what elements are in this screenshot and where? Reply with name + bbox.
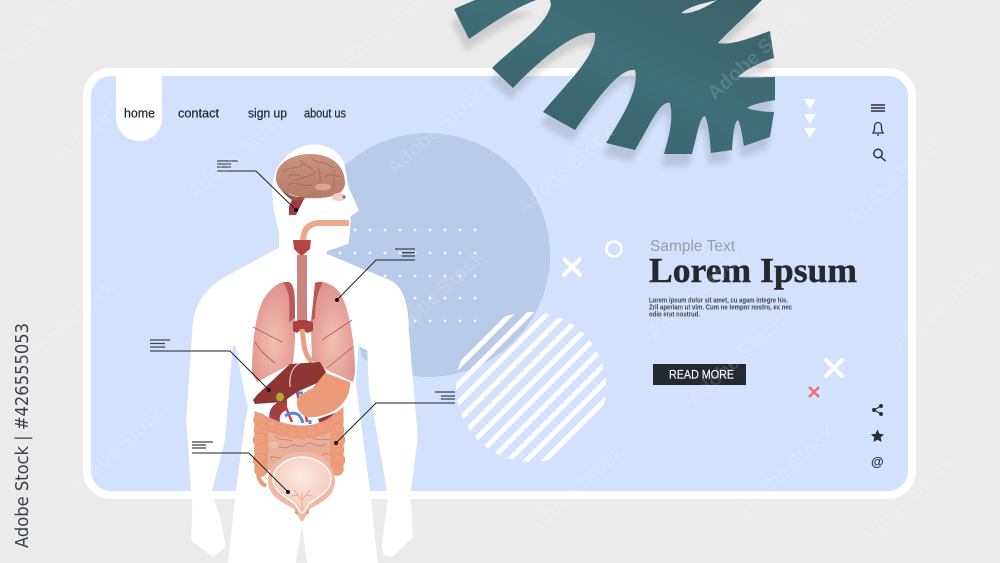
nav links: contact xyxy=(178,106,220,120)
large blue circle xyxy=(306,133,550,377)
nav links: home xyxy=(124,106,155,120)
icon: share xyxy=(872,404,882,416)
organ: left lung xyxy=(252,282,295,382)
leaf shadow xyxy=(451,12,772,166)
body text: Zril aperiam ut vim. Cum ne tempor nostro, ex nec xyxy=(649,304,792,312)
stock overlay marks: Adobe Stock xyxy=(13,276,119,375)
icon: bell xyxy=(873,122,883,135)
organ: stomach xyxy=(297,372,350,417)
side credit: Adobe Stock | #426555053 xyxy=(12,323,33,548)
icon: menu xyxy=(871,105,885,111)
icon: at sign: @ xyxy=(871,454,884,469)
body text xyxy=(649,298,792,318)
organ: brain xyxy=(276,154,346,215)
stock overlay marks: Adobe Stock xyxy=(733,421,839,520)
dot grid xyxy=(339,229,476,322)
body silhouette xyxy=(187,145,417,563)
read more button: READ MORE xyxy=(669,368,734,382)
icon: search xyxy=(874,149,886,161)
organ: larynx xyxy=(293,240,311,255)
headline: Lorem Ipsum xyxy=(649,251,857,290)
organ: pharynx tube xyxy=(303,223,349,242)
stock overlay marks: Adobe Stock xyxy=(643,246,749,345)
eyebrow text: Sample Text xyxy=(650,238,736,255)
stock overlay marks: Adobe Stock xyxy=(523,441,629,540)
callout: bladder xyxy=(192,442,290,494)
nav links xyxy=(124,106,346,120)
organ: trachea xyxy=(297,255,307,323)
organ: large intestine xyxy=(253,414,345,486)
callout: intestine xyxy=(334,392,455,445)
stock overlay marks: Adobe Stock xyxy=(843,131,949,230)
stock overlay marks: Adobe Stock xyxy=(888,256,994,355)
decoration: white cross xyxy=(563,258,581,276)
stock overlay marks: Adobe Stock xyxy=(513,121,619,220)
organ: liver xyxy=(253,362,326,404)
arm gaps xyxy=(212,343,388,563)
callout: lungs xyxy=(335,249,415,302)
organ: bladder xyxy=(268,452,335,521)
callout: brain xyxy=(217,161,298,212)
icon: star xyxy=(871,430,884,442)
callout: liver xyxy=(150,340,271,392)
monstera leaf xyxy=(454,0,775,154)
decoration: triangles xyxy=(804,99,816,138)
stock overlay marks: Adobe Stock xyxy=(383,81,489,180)
read more button xyxy=(653,364,746,385)
nav links: sign up xyxy=(248,106,287,120)
stock overlay marks: Adobe Stock xyxy=(183,106,289,205)
lung details xyxy=(253,282,353,368)
decoration: pink cross xyxy=(809,387,819,397)
organ: small intestine xyxy=(267,428,335,470)
organ: esophagus xyxy=(302,329,312,362)
nav: home tab xyxy=(116,75,162,141)
stock overlay marks: Adobe Stock xyxy=(383,246,489,345)
stock overlay marks: Adobe Stock xyxy=(853,451,959,550)
striped circle xyxy=(456,312,606,462)
decoration: ring xyxy=(606,242,622,256)
organ: vessels and kidney xyxy=(269,392,340,424)
decoration: white cross lower xyxy=(825,359,843,377)
nav links: about us xyxy=(304,106,346,120)
stock overlay marks: Adobe Stock xyxy=(53,66,159,165)
organ: right lung xyxy=(311,282,355,382)
body text: Lorem ipsum dolor sit amet, cu agam integre his. xyxy=(649,298,788,304)
panel: browser frame xyxy=(87,72,912,495)
stock overlay marks: Adobe Stock xyxy=(683,311,789,410)
stock overlay marks: Adobe Stock xyxy=(63,401,169,500)
stock overlay marks: Adobe Stock xyxy=(703,6,809,105)
body text: odio erat nostrud. xyxy=(649,312,700,318)
